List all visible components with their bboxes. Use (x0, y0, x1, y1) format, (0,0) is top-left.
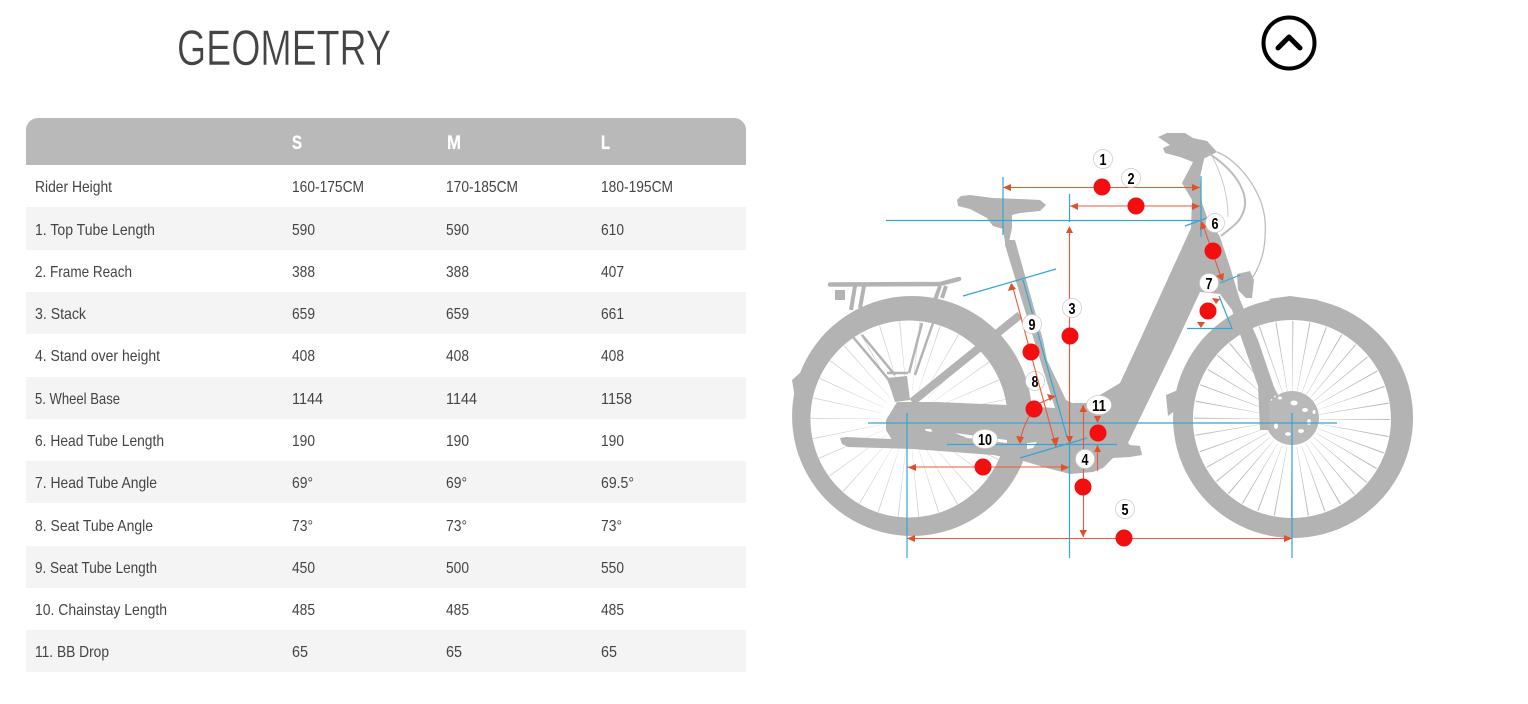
row: chainstay length: 485 (601, 602, 624, 619)
measurement 11: bb drop: 11 (1092, 398, 1106, 415)
row: bb drop: 65 (446, 644, 462, 661)
icon: scroll up chevron (1264, 18, 1314, 68)
measurement 7: head tube angle (1197, 274, 1220, 328)
measurement 9: seat tube length: 9 (1028, 317, 1036, 334)
row: seat tube length: 9. Seat Tube Length (35, 560, 157, 577)
row: top tube length: 590 (292, 222, 315, 239)
row: stack: 661 (601, 306, 624, 323)
row: stack: 659 (292, 306, 315, 323)
row: seat tube angle (35, 518, 622, 535)
measurement 6: head tube length (1200, 214, 1224, 281)
row: top tube length (26, 207, 746, 250)
brake cables (1208, 152, 1265, 277)
geometry table (26, 118, 746, 672)
blue reference lines (868, 176, 1337, 558)
row: head tube angle: 69° (446, 475, 467, 492)
row: wheel base: 1144 (292, 391, 323, 408)
row: seat tube length (26, 546, 746, 588)
row: seat tube angle: 8. Seat Tube Angle (35, 518, 153, 535)
row: bb drop: 11. BB Drop (35, 644, 109, 661)
row: top tube length: 590 (446, 222, 469, 239)
row: stand over height: 408 (292, 348, 315, 365)
row: rider height: 160-175CM (292, 179, 364, 196)
frame, chain guard and fork (886, 155, 1293, 474)
row: top tube length: 1. Top Tube Length (35, 222, 155, 239)
measurement 8: seat tube angle (1016, 372, 1056, 444)
rear rack (830, 279, 1020, 402)
measurement 10: chainstay length: 10 (978, 432, 992, 449)
row: frame reach: 2. Frame Reach (35, 264, 132, 281)
row: head tube length (35, 433, 624, 450)
chainstay gaps (925, 429, 1037, 449)
row: chainstay length: 485 (292, 602, 315, 619)
measurement 4: stand over height: 4 (1082, 452, 1089, 469)
row: stack (26, 292, 746, 334)
table header: L (601, 133, 610, 154)
row: seat tube length: 450 (292, 560, 315, 577)
table header (26, 118, 746, 165)
bike silhouette (792, 133, 1413, 538)
bike geometry diagram (792, 133, 1413, 558)
table header: M (447, 133, 461, 154)
kickstand (840, 437, 913, 449)
measurement 7: head tube angle: 7 (1206, 276, 1213, 293)
measurement 2: frame reach (1070, 168, 1200, 214)
row: bb drop: 65 (601, 644, 617, 661)
row: wheel base: 1158 (601, 391, 632, 408)
measurement 11: bb drop (1086, 396, 1112, 471)
row: chainstay length (35, 602, 624, 619)
row: frame reach: 407 (601, 264, 624, 281)
handlebar (1158, 133, 1217, 162)
row: bb drop (26, 630, 746, 672)
row: head tube angle (26, 461, 746, 503)
row: frame reach: 388 (292, 264, 315, 281)
row: chainstay length: 10. Chainstay Length (35, 602, 167, 619)
row: wheel base: 5. Wheel Base (35, 391, 120, 408)
row: head tube length: 6. Head Tube Length (35, 433, 164, 450)
row: stand over height: 408 (446, 348, 469, 365)
measurement 10: chainstay length (907, 430, 1069, 476)
row: frame reach (35, 264, 624, 281)
row: frame reach: 388 (446, 264, 469, 281)
row: head tube angle: 69° (292, 475, 313, 492)
measurement 6: head tube length: 6 (1212, 216, 1219, 233)
front brake disc (1258, 384, 1320, 446)
rear wheel (792, 296, 1032, 536)
measurement 1: top tube length (1003, 150, 1200, 196)
row: stand over height (35, 348, 624, 365)
row: wheel base: 1144 (446, 391, 477, 408)
row: stack: 3. Stack (35, 306, 87, 323)
row: stack: 659 (446, 306, 469, 323)
measurement 5: wheel base (907, 500, 1292, 546)
row: head tube length: 190 (292, 433, 315, 450)
saddle (957, 195, 1046, 242)
title: GEOMETRY (177, 20, 391, 76)
row: rider height (35, 179, 673, 196)
row: top tube length: 610 (601, 222, 624, 239)
row: head tube length: 190 (601, 433, 624, 450)
row: head tube angle: 69.5° (601, 475, 634, 492)
row: rider height: 180-195CM (601, 179, 673, 196)
row: stand over height: 408 (601, 348, 624, 365)
measurement 8: seat tube angle: 8 (1032, 374, 1039, 391)
row: wheel base (26, 377, 746, 419)
row: bb drop: 65 (292, 644, 308, 661)
row: seat tube angle: 73° (601, 518, 622, 535)
measurement 4: stand over height (1074, 405, 1094, 537)
measurement 3: stack: 3 (1068, 301, 1076, 318)
measurement 5: wheel base: 5 (1122, 502, 1129, 519)
measurement 1: top tube length: 1 (1100, 152, 1107, 169)
measurement 3: stack (1062, 226, 1082, 444)
table header: S (292, 133, 302, 154)
row: seat tube angle: 73° (446, 518, 467, 535)
row: stand over height: 4. Stand over height (35, 348, 160, 365)
row: seat tube angle: 73° (292, 518, 313, 535)
measurement 2: frame reach: 2 (1128, 171, 1135, 188)
measurement 9: seat tube length (1008, 283, 1059, 447)
row: rider height: Rider Height (35, 179, 112, 196)
row: seat tube length: 550 (601, 560, 624, 577)
front mudguard bracket (1237, 271, 1254, 298)
row: seat tube length: 500 (446, 560, 469, 577)
row: head tube length: 190 (446, 433, 469, 450)
front wheel (1166, 296, 1413, 538)
row: chainstay length: 485 (446, 602, 469, 619)
row: head tube angle: 7. Head Tube Angle (35, 475, 157, 492)
row: rider height: 170-185CM (446, 179, 518, 196)
